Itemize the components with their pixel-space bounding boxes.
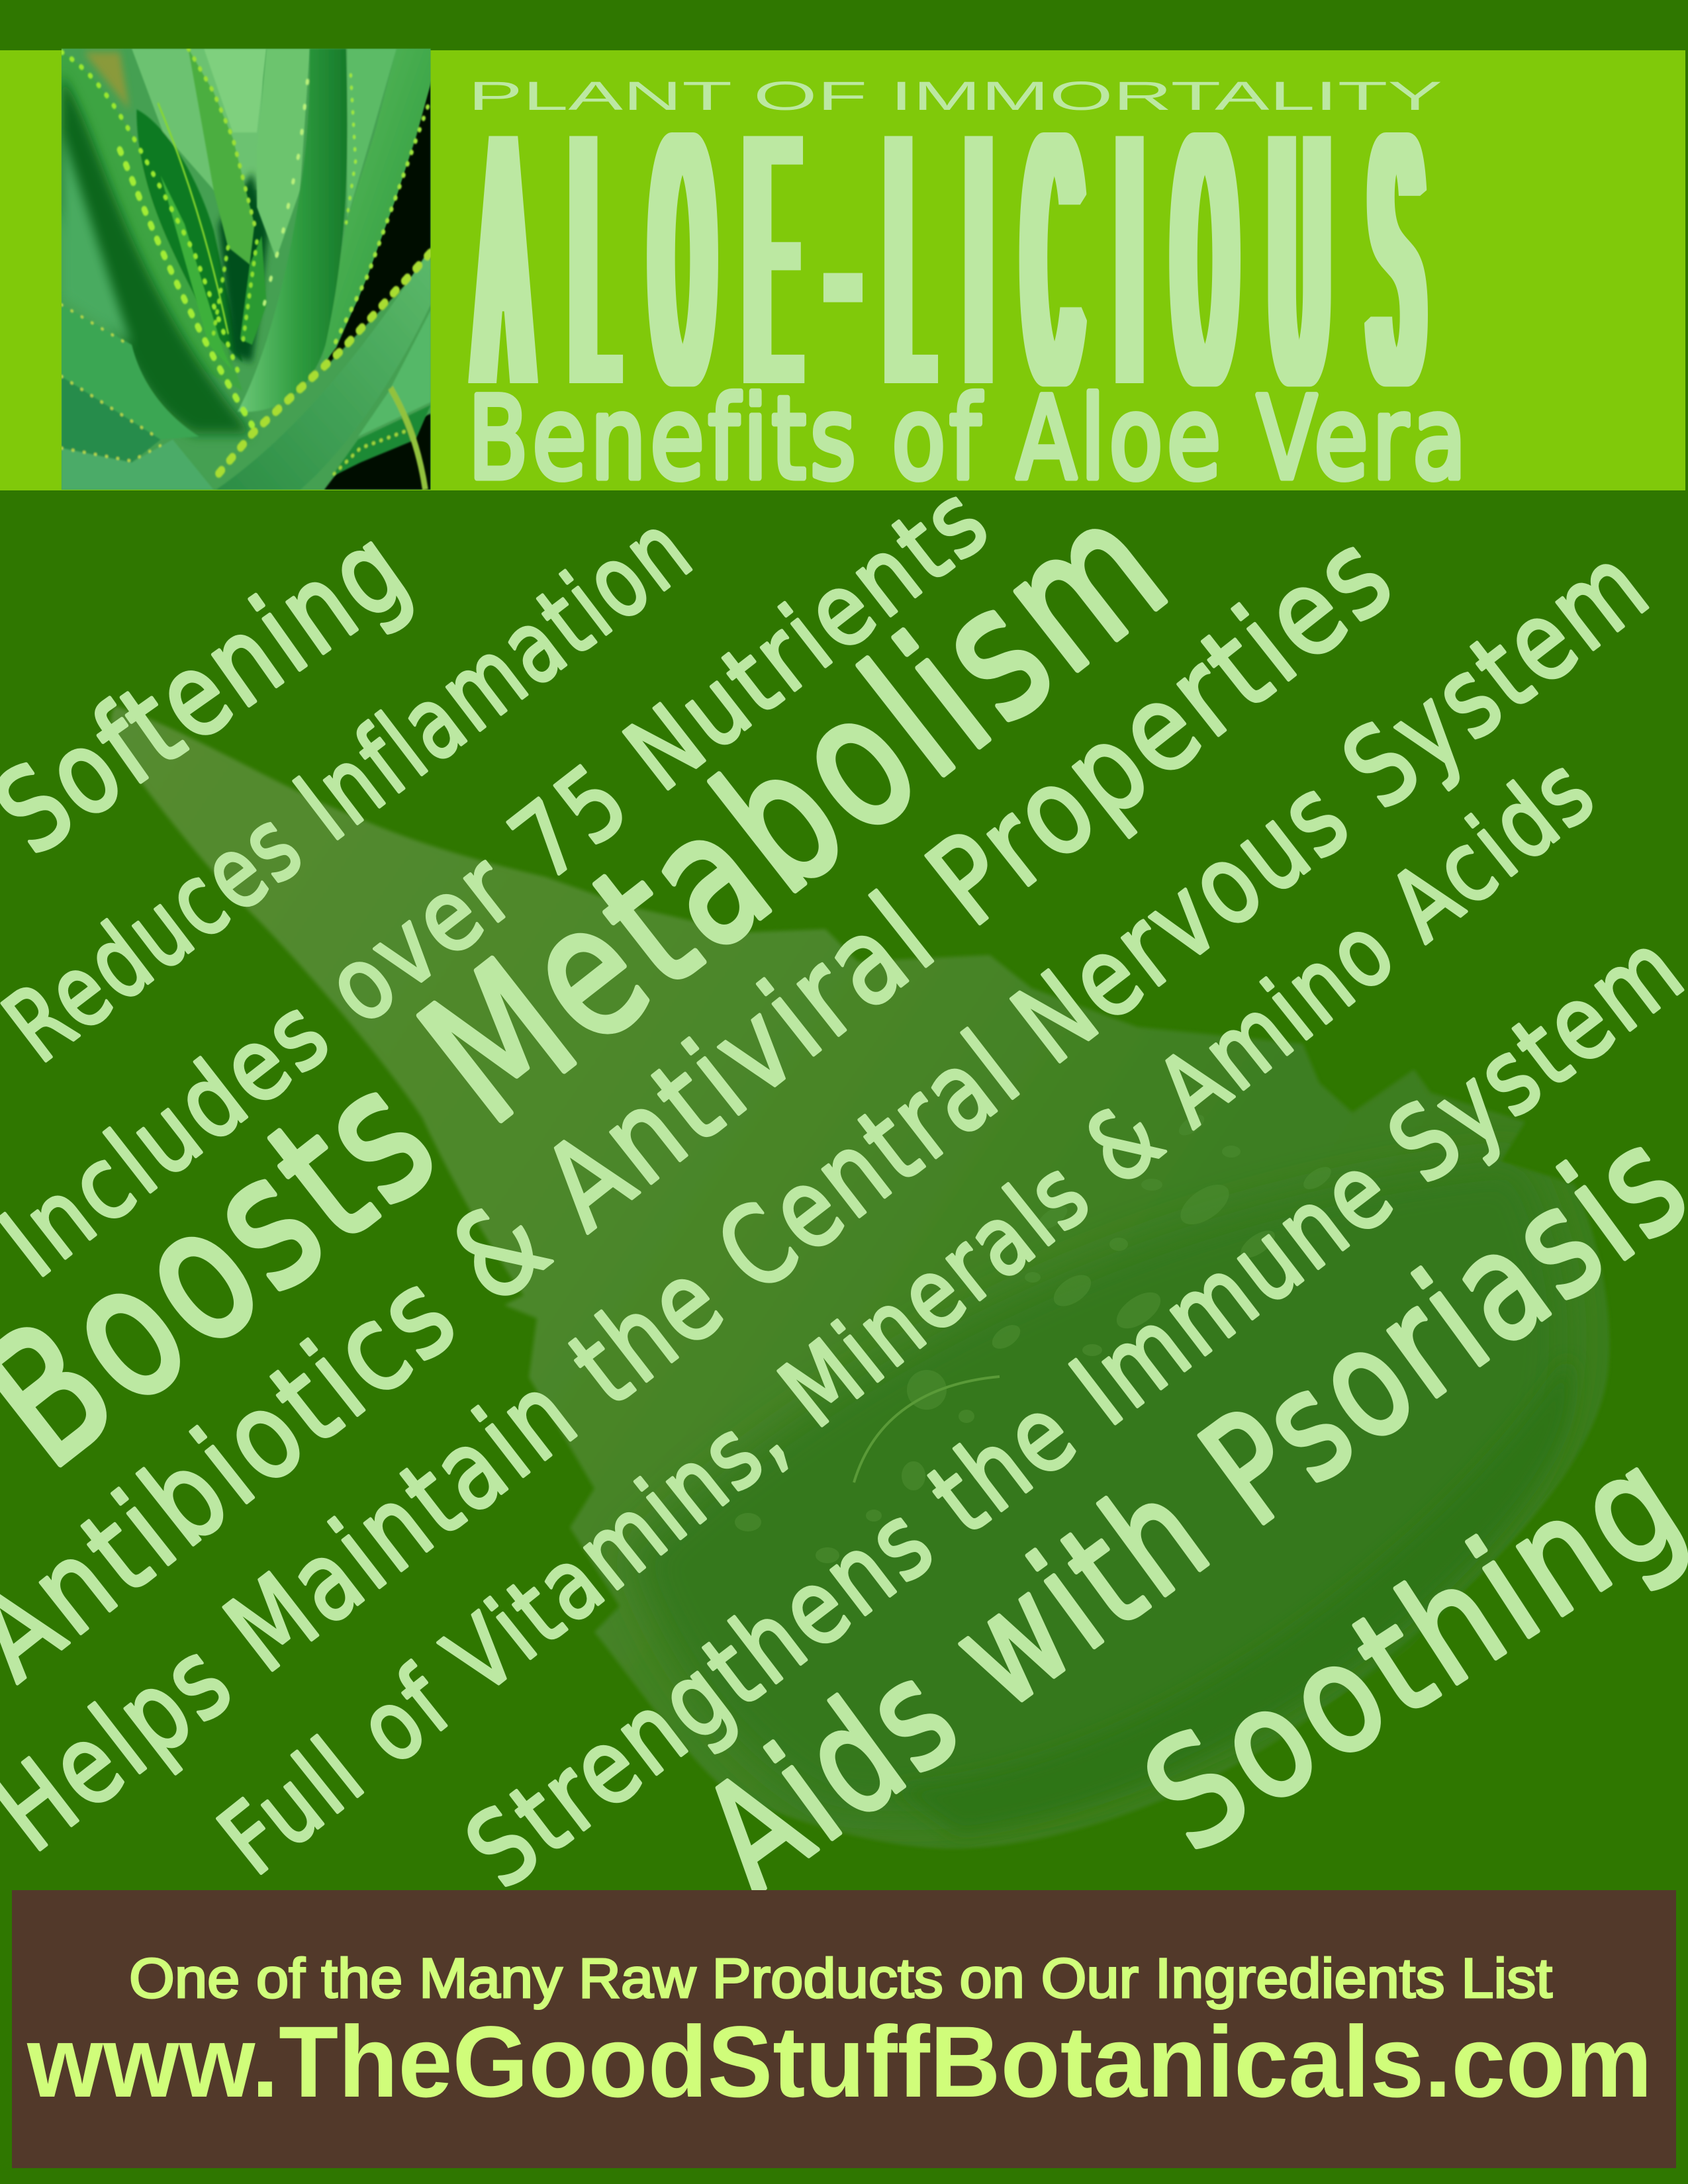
dark inner leaf bbox=[136, 109, 242, 362]
upper left leaf edges bbox=[62, 52, 242, 390]
spiny upper centre leaf bbox=[188, 48, 254, 265]
stem bbox=[391, 388, 426, 490]
translucent aloe leaf bbox=[111, 706, 1609, 1848]
right pale leaf bbox=[322, 48, 431, 365]
benefit: reduces inflamation: Reduces Inflamation bbox=[0, 491, 714, 1085]
right bottom leaf bbox=[358, 310, 431, 437]
spines bbox=[62, 48, 430, 480]
front leaf bbox=[216, 248, 431, 490]
black background gaps bbox=[322, 81, 431, 490]
heading: plant of immortality: PLANT OF IMMORTALITY bbox=[468, 73, 1442, 118]
dark gaps between spines bbox=[218, 173, 269, 362]
footer panel bbox=[12, 1890, 1676, 2168]
olive blur at top left bbox=[83, 52, 129, 109]
header band bbox=[0, 50, 1685, 490]
upper pale centre area bbox=[132, 48, 264, 190]
central bright leaf bbox=[238, 48, 348, 412]
photo: aloe plant bbox=[61, 49, 431, 490]
title: aloe-licious: ALOE-LICIOUS bbox=[479, 59, 1421, 459]
big dark left leaf bbox=[62, 75, 252, 433]
footer url: www.TheGoodStuffBotanicals.com bbox=[26, 2005, 1652, 2118]
footer line: ingredients list: One of the Many Raw Products on Our Ingredients List bbox=[129, 1947, 1552, 2009]
benefit: includes over 75 nutrients: Includes over 75 Nutrients bbox=[0, 461, 1011, 1299]
